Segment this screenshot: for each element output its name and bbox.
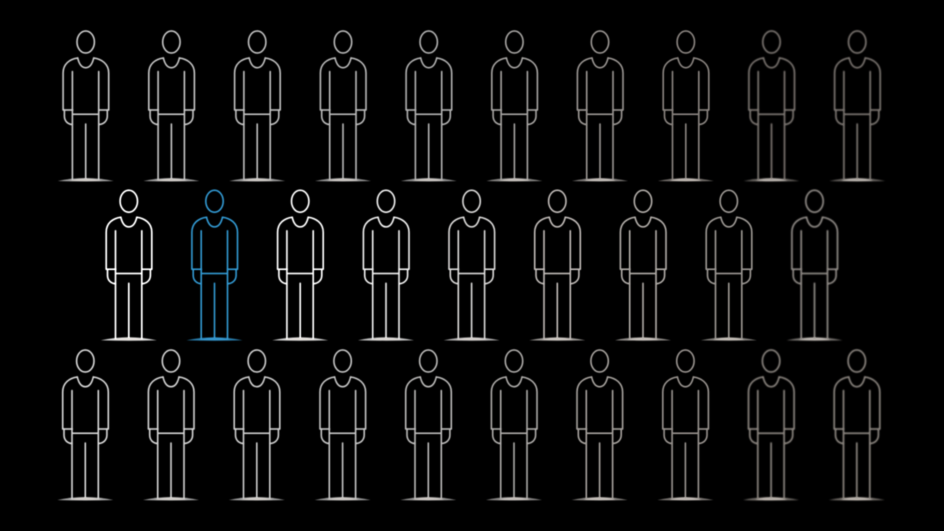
row 1 [58, 31, 885, 182]
highlighted blue person [186, 190, 242, 341]
row 2 [101, 190, 843, 341]
row 3 [57, 350, 885, 500]
